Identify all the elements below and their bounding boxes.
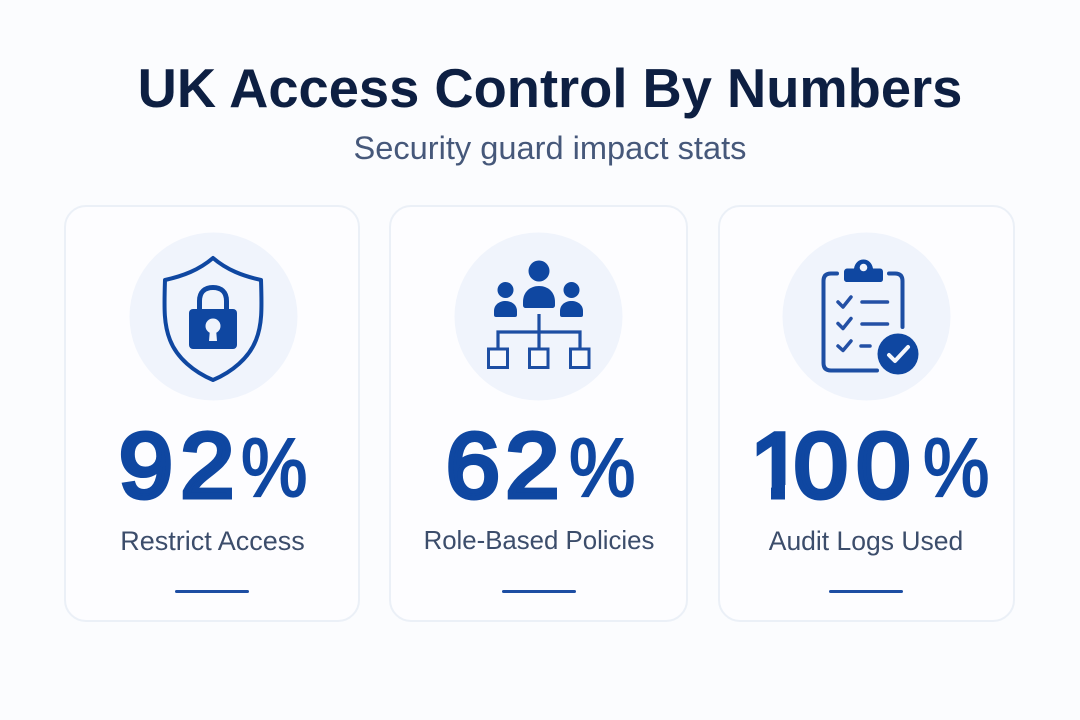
title: UK Access Control By Numbers (138, 58, 962, 119)
accent line: card 2 (502, 590, 576, 593)
stat: 92% (119, 415, 307, 517)
stat: 100% (750, 415, 989, 517)
subtitle: Security guard impact stats (354, 129, 746, 166)
label: restrict access: Restrict Access (120, 526, 305, 556)
stat: 92%: % (241, 421, 307, 514)
stat: 92%: 92 (119, 415, 242, 517)
panel: restrict access (64, 205, 360, 622)
stat: 100%: 1 (750, 415, 804, 517)
stat: 62%: 62 (446, 415, 565, 517)
panel: audit logs used (718, 205, 1015, 622)
stat: 100%: % (923, 421, 989, 514)
accent line: card 3 (829, 590, 903, 593)
label: audit logs used: Audit Logs Used (769, 526, 963, 556)
accent line: card 1 (175, 590, 249, 593)
panel: role-based policies (389, 205, 688, 622)
stat: 62%: % (569, 421, 635, 514)
stat: 62% (446, 415, 635, 517)
label: role-based policies: Role-Based Policies (424, 527, 654, 555)
stat: 100%: 00 (794, 415, 919, 517)
